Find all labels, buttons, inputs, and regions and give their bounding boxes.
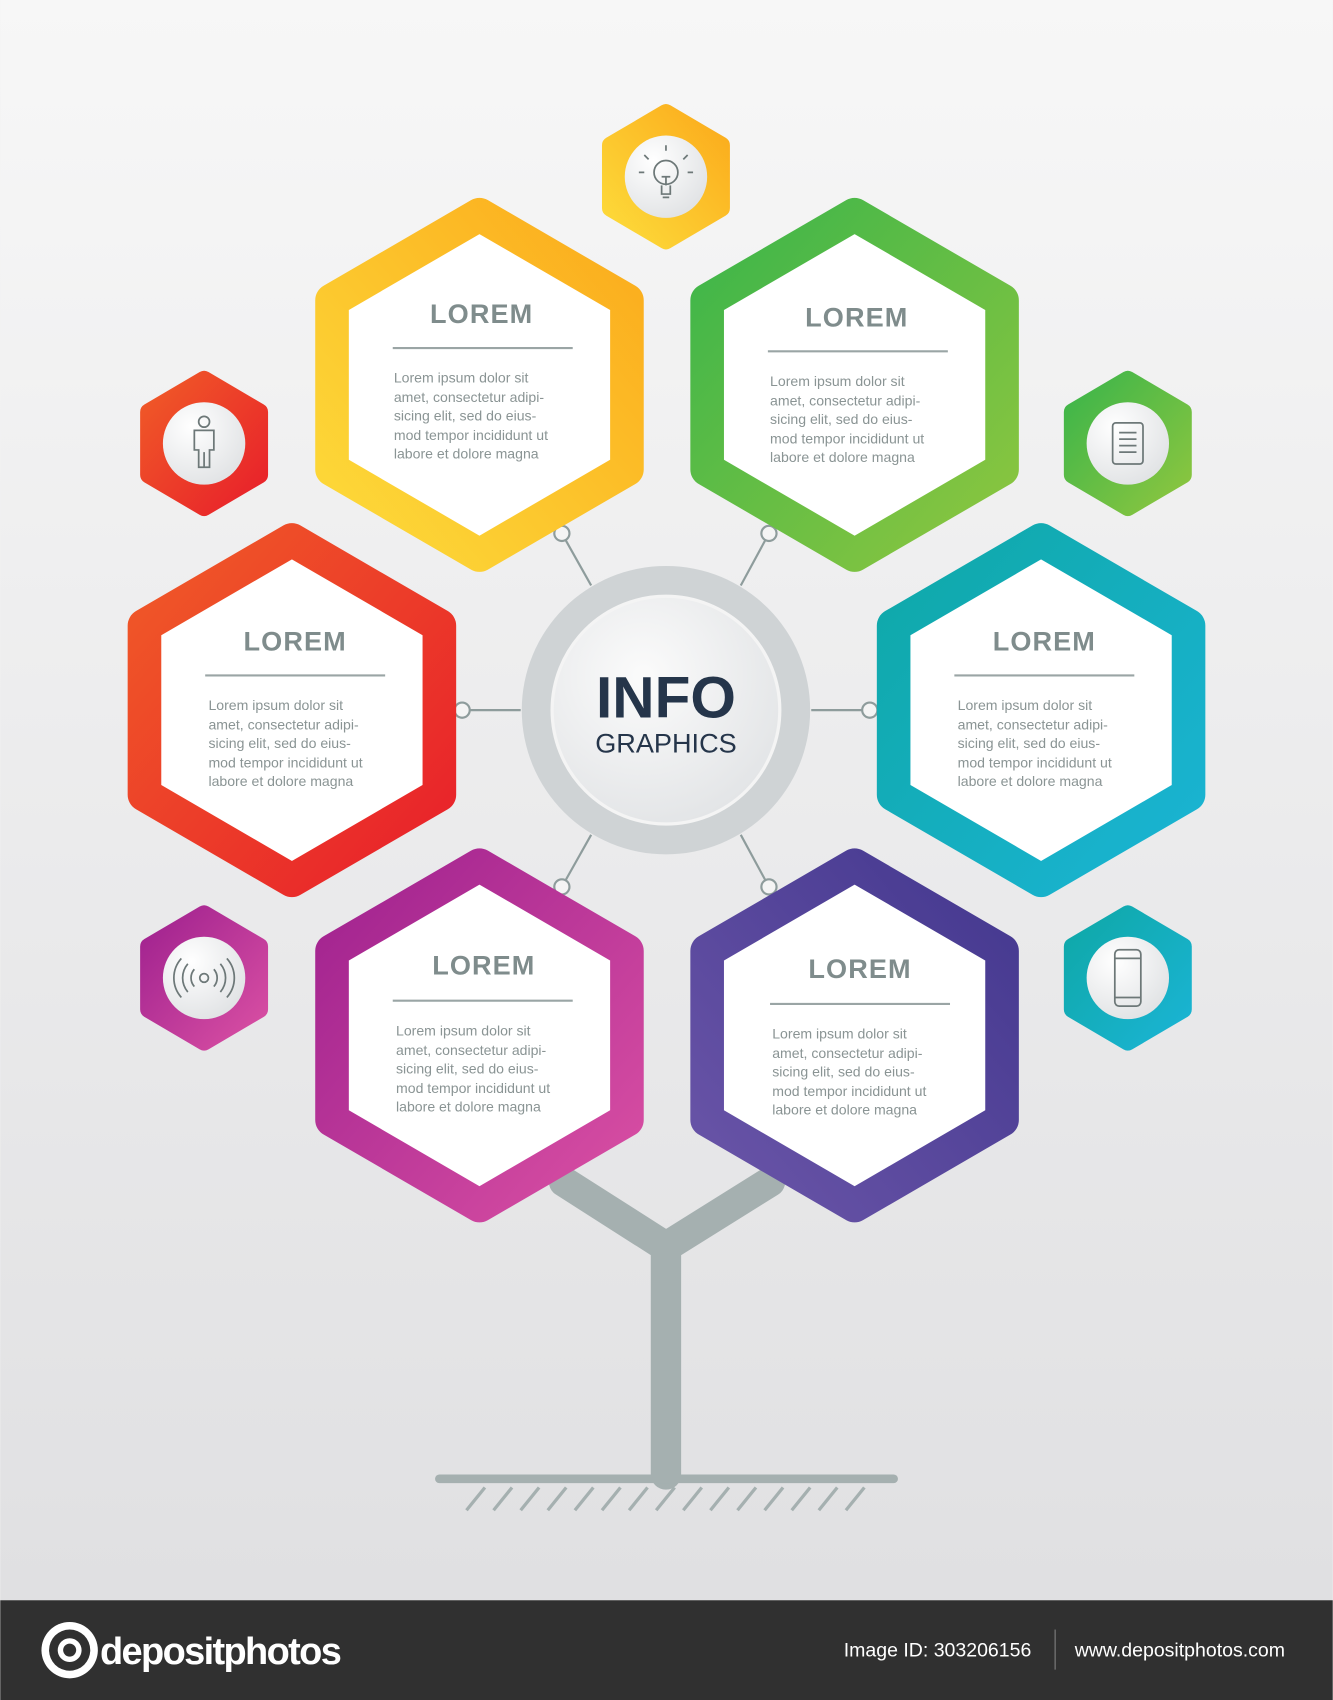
- center circle: GRAPHICS: [595, 727, 737, 758]
- tree trunk: [439, 1182, 894, 1479]
- hex: green: labore et dolore magna: [770, 449, 915, 465]
- hex: yellow: LOREM: [430, 298, 533, 329]
- footer: depositphotos: [100, 1631, 341, 1673]
- hex: red: Lorem ipsum dolor sit: [208, 697, 343, 713]
- hex: red: [144, 540, 439, 880]
- hex: purple: [332, 865, 627, 1206]
- hex: green: LOREM: [805, 301, 908, 332]
- icon hex: document: [1073, 379, 1183, 507]
- hex: indigo: LOREM: [808, 953, 912, 984]
- hex: green: [707, 215, 1002, 555]
- hex: teal: Lorem ipsum dolor sit: [958, 697, 1092, 713]
- center circle: [522, 566, 810, 854]
- center circle: INFO: [596, 666, 736, 731]
- footer: Image ID: 303206156: [844, 1640, 1031, 1662]
- hex: green: sicing elit, sed do eius-: [770, 411, 913, 427]
- hex: teal: [894, 540, 1189, 880]
- hex: red: mod tempor incididunt ut: [208, 755, 363, 771]
- icon hex: bulb: [611, 113, 721, 241]
- hex: yellow: amet, consectetur adipi-: [394, 389, 544, 405]
- hex: purple: amet, consectetur adipi-: [396, 1042, 547, 1058]
- hex: yellow: Lorem ipsum dolor sit: [394, 370, 528, 386]
- hex: red: LOREM: [244, 626, 347, 657]
- connectors: [455, 526, 877, 894]
- hex: indigo: labore et dolore magna: [772, 1102, 917, 1118]
- hex: purple: mod tempor incididunt ut: [396, 1080, 550, 1096]
- hex: teal: LOREM: [993, 626, 1096, 657]
- hex: indigo: mod tempor incididunt ut: [772, 1083, 926, 1099]
- hex: purple: sicing elit, sed do eius-: [396, 1060, 539, 1076]
- hex: green: amet, consectetur adipi-: [770, 392, 921, 408]
- hex: purple: labore et dolore magna: [396, 1098, 541, 1114]
- hex: teal: sicing elit, sed do eius-: [958, 735, 1100, 751]
- hex: indigo: [707, 865, 1002, 1206]
- hex: indigo: sicing elit, sed do eius-: [772, 1064, 915, 1080]
- hex: teal: mod tempor incididunt ut: [958, 755, 1112, 771]
- hex: indigo: amet, consectetur adipi-: [772, 1045, 923, 1061]
- hex: yellow: labore et dolore magna: [394, 446, 539, 462]
- hex: yellow: mod tempor incididunt ut: [394, 427, 548, 443]
- footer: [0, 1600, 1333, 1700]
- hex: indigo: Lorem ipsum dolor sit: [772, 1026, 907, 1042]
- icon hex: phone: [1073, 914, 1183, 1042]
- hex: yellow: [332, 215, 627, 555]
- hex: red: amet, consectetur adipi-: [208, 717, 359, 733]
- icon hex: signal: [149, 914, 259, 1042]
- hex: red: sicing elit, sed do eius-: [208, 735, 351, 751]
- hex: yellow: sicing elit, sed do eius-: [394, 408, 537, 424]
- hex: purple: Lorem ipsum dolor sit: [396, 1022, 531, 1038]
- hex: green: Lorem ipsum dolor sit: [770, 373, 905, 389]
- hex: teal: amet, consectetur adipi-: [958, 717, 1108, 733]
- ground hatch: [466, 1488, 864, 1510]
- hex: purple: LOREM: [432, 950, 535, 981]
- hex: teal: labore et dolore magna: [958, 773, 1103, 789]
- icon hex: person: [149, 379, 259, 507]
- hex: red: labore et dolore magna: [208, 773, 353, 789]
- footer: www.depositphotos.com: [1074, 1640, 1285, 1662]
- hex: green: mod tempor incididunt ut: [770, 430, 924, 446]
